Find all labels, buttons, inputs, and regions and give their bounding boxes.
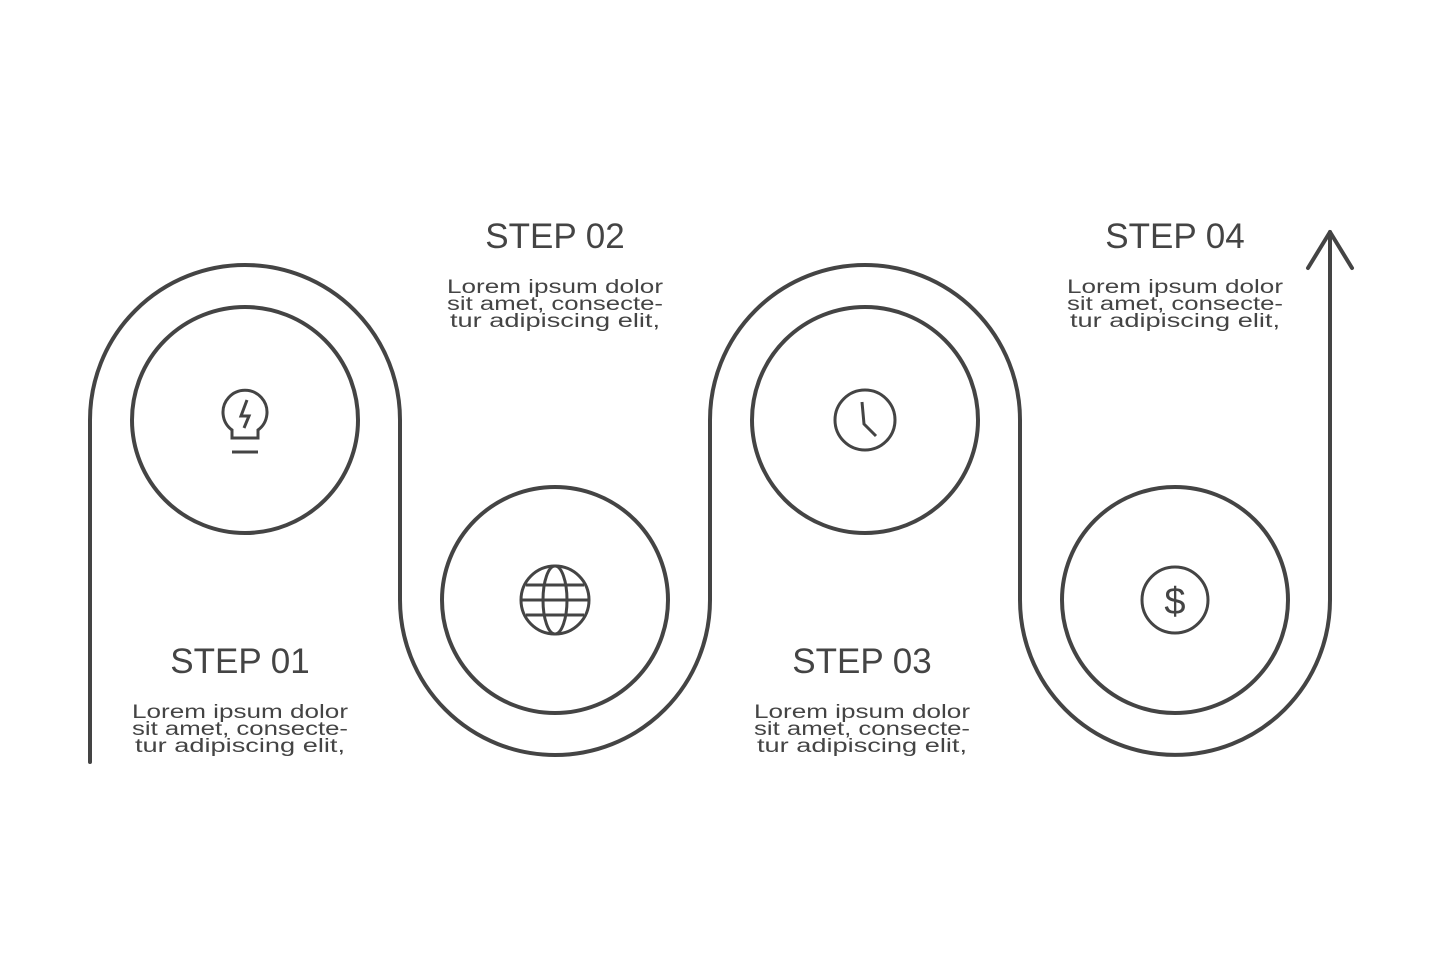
step 02 text [447, 217, 664, 332]
step 01 text: STEP 01 [170, 642, 310, 681]
circle step 1 with bulb icon [132, 307, 358, 533]
winding path with arrow [90, 232, 1352, 762]
step 03 text: Lorem ipsum dolor [754, 702, 971, 723]
step 04 text: sit amet, consecte- [1067, 294, 1283, 315]
circle step 4 with dollar icon [1062, 487, 1288, 713]
step 01 text: Lorem ipsum dolor [132, 702, 349, 723]
step 01 text: tur adipiscing elit, [135, 736, 345, 757]
circle step 4 with dollar icon: $ [1164, 581, 1186, 623]
circle step 3 with clock icon [752, 307, 978, 533]
step 04 text: Lorem ipsum dolor [1067, 277, 1284, 298]
step 03 text [754, 642, 971, 757]
step 04 text [1067, 217, 1284, 332]
step 02 text: Lorem ipsum dolor [447, 277, 664, 298]
step 01 text [132, 642, 349, 757]
step 03 text: sit amet, consecte- [754, 719, 970, 740]
step 02 text: STEP 02 [485, 217, 625, 256]
circle step 2 with globe icon [442, 487, 668, 713]
step 03 text: STEP 03 [792, 642, 932, 681]
step 02 text: sit amet, consecte- [447, 294, 663, 315]
step 04 text: tur adipiscing elit, [1070, 311, 1280, 332]
step 03 text: tur adipiscing elit, [757, 736, 967, 757]
step 02 text: tur adipiscing elit, [450, 311, 660, 332]
step 01 text: sit amet, consecte- [132, 719, 348, 740]
step 04 text: STEP 04 [1105, 217, 1245, 256]
